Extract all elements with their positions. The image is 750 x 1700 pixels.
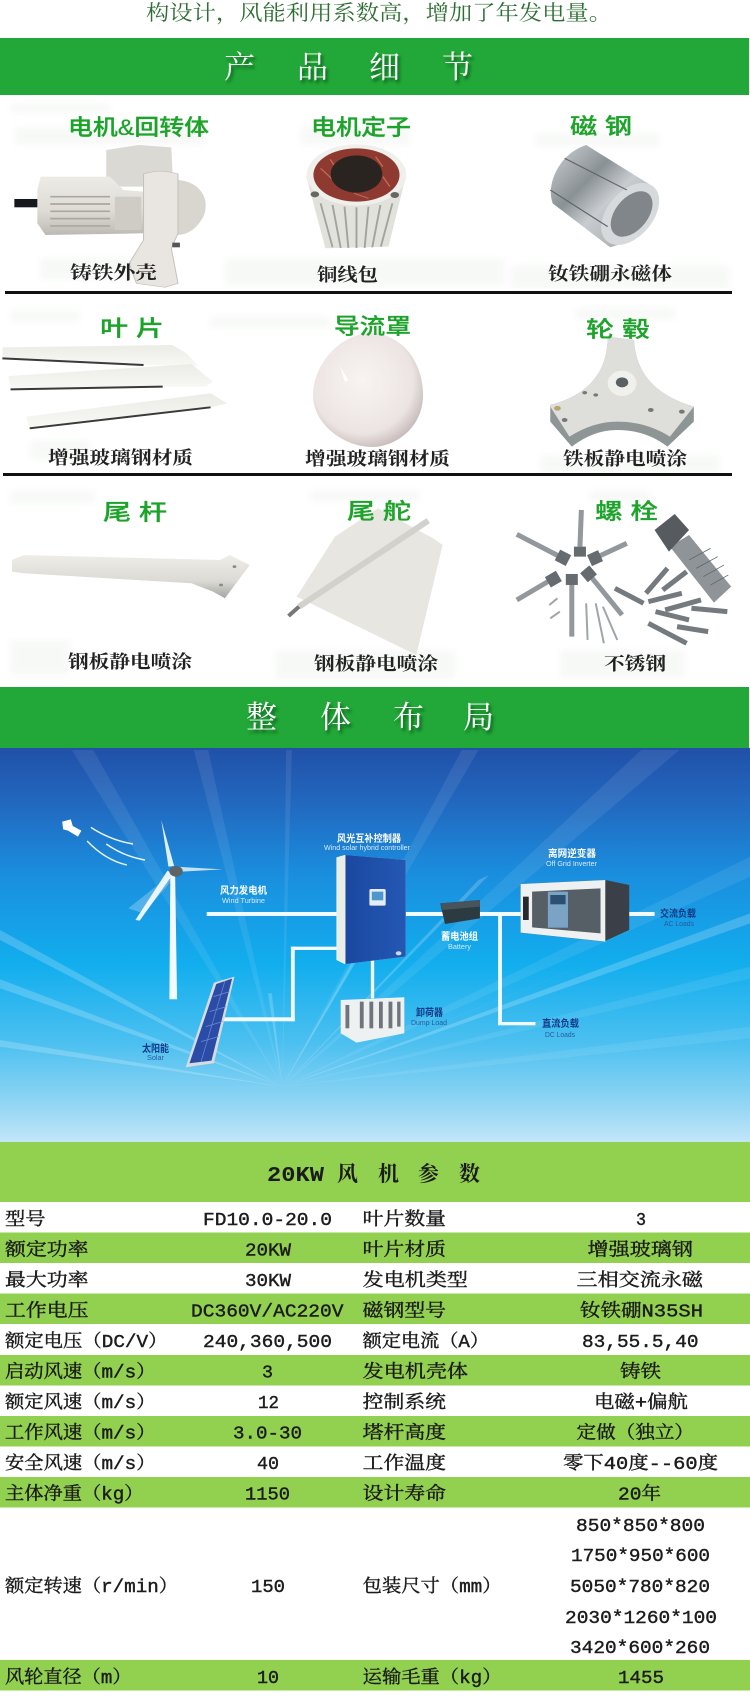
label: solar: Solar (147, 1055, 165, 1062)
panel: system diagram (0, 748, 750, 1142)
row: working voltage: DC360V/AC220V (191, 1302, 344, 1322)
row 3 product: tail boom: 钢板静电喷涂 (68, 651, 193, 672)
row: rated speed and package size (5, 1517, 717, 1659)
row: rated speed and package size: 150 (251, 1578, 285, 1598)
striped row backgrounds (0, 1232, 750, 1690)
label: controller (324, 832, 411, 852)
label: dump load: Dump Load (411, 1020, 447, 1027)
row 3 product: bolts: 不锈钢 (604, 654, 666, 674)
label: DC loads: DC Loads (545, 1032, 575, 1039)
label: AC loads (660, 907, 696, 928)
icon: battery (440, 900, 480, 924)
row 3 product: bolts: 螺 栓 (595, 499, 658, 524)
icon: dump load (341, 997, 404, 1043)
label: battery (441, 930, 478, 951)
row 1 product: magnets: 钕铁硼永磁体 (548, 263, 672, 284)
row: rated voltage: 额定电压（DC/V） (5, 1331, 168, 1353)
row 1 product: motor and slewing body (14, 115, 209, 287)
row: rated power: 额定功率 (5, 1240, 88, 1262)
row 3 product: tail boom: 尾 杆 (103, 500, 167, 525)
label: DC loads: 直流负载 (542, 1017, 579, 1030)
row: model: 3 (636, 1211, 646, 1231)
icon: nose cone (313, 333, 423, 447)
row: rated speed and package size: 包装尺寸（mm） (363, 1576, 502, 1598)
row: safe wind speed: 40 (257, 1455, 279, 1475)
row: max power: 最大功率 (5, 1270, 88, 1292)
banner: overall layout (0, 687, 749, 748)
divider line (5, 291, 732, 294)
icon: bolts (517, 510, 731, 643)
row: rated voltage: 额定电流（A） (363, 1331, 489, 1353)
row 3 product: tail fin: 钢板静电喷涂 (314, 653, 439, 674)
icon: tail boom (12, 555, 250, 598)
row: rated voltage: 240,360,500 (203, 1333, 332, 1353)
row: working wind speed: 3.0-30 (233, 1424, 302, 1444)
row: rated wind speed: 控制系统 (363, 1392, 446, 1414)
row: rated speed and package size: 3420*600*260 (570, 1639, 710, 1659)
table header: 风机参数 (337, 1163, 480, 1188)
row: working wind speed: 塔杆高度 (363, 1422, 446, 1444)
row 1 product: stator: 电机定子 (311, 115, 411, 140)
label: AC loads: AC Loads (664, 921, 694, 928)
row: max power: 三相交流永磁 (576, 1270, 704, 1292)
row: rated speed and package size: 1750*950*600 (571, 1547, 710, 1567)
icon: hub (550, 337, 694, 447)
label: AC loads: 交流负载 (660, 907, 696, 920)
row: rated wind speed: 12 (258, 1394, 279, 1414)
row: max power (5, 1270, 704, 1292)
row: rated power (5, 1240, 693, 1262)
row: rated wind speed: 电磁+偏航 (594, 1392, 688, 1414)
row 2 product: nose cone: 增强玻璃钢材质 (305, 448, 450, 469)
row: net weight: 1150 (245, 1486, 290, 1506)
label: wind turbine (220, 884, 267, 905)
table: 20KW turbine parameters (0, 1142, 750, 1690)
top intro text: 构设计，风能利用系数高，增加了年发电量。 (146, 1, 612, 26)
row: safe wind speed (5, 1453, 718, 1475)
row 1 product: motor and slewing body: 铸铁外壳 (70, 263, 157, 283)
row: rated speed and package size: 额定转速（r/min） (5, 1576, 178, 1598)
row: working voltage: 工作电压 (5, 1300, 88, 1322)
row 3 product: tail fin (289, 499, 443, 674)
table header: 20KW (267, 1165, 324, 1188)
row: start wind speed (5, 1362, 661, 1384)
banner: product details (0, 38, 749, 95)
row: working wind speed (5, 1422, 694, 1444)
row: max power: 30KW (245, 1272, 291, 1292)
row: net weight: 20年 (618, 1482, 661, 1506)
row: safe wind speed: 零下40度--60度 (563, 1453, 718, 1475)
label: dump load: 卸荷器 (416, 1006, 443, 1019)
row: working wind speed: 定做（独立） (576, 1422, 694, 1444)
row 2 product: blades (2, 316, 227, 468)
row 3 product: bolts (517, 499, 731, 674)
icon: inverter (521, 880, 629, 942)
row: rated power: 增强玻璃钢 (588, 1240, 693, 1262)
row: rated speed and package size: 5050*780*820 (570, 1578, 710, 1598)
row 2 product: hub (550, 317, 694, 469)
row 1 product: magnets: 磁 钢 (570, 114, 632, 139)
banner: overall layout: 整体布局 (246, 700, 494, 735)
row: rated speed and package size: 850*850*800 (576, 1517, 705, 1537)
row 3 product: tail boom (12, 500, 250, 672)
banner: product details: 产品细节 (224, 50, 473, 85)
icon: stator (306, 144, 406, 248)
row 2 product: hub: 铁板静电喷涂 (563, 448, 688, 469)
label: inverter: Off Grid Inverter (546, 861, 598, 868)
row: start wind speed: 铸铁 (620, 1362, 661, 1384)
row: working voltage: 磁钢型号 (363, 1300, 446, 1322)
label: dump load (411, 1006, 447, 1027)
row: safe wind speed: 安全风速（m/s） (5, 1453, 156, 1475)
row 2 product: nose cone (305, 314, 450, 469)
row: start wind speed: 启动风速（m/s） (5, 1362, 156, 1384)
row: start wind speed: 发电机壳体 (363, 1362, 468, 1384)
row: rated voltage (5, 1331, 698, 1353)
row: rotor diameter: 风轮直径（m） (5, 1667, 132, 1689)
row 1 product: magnets (548, 114, 672, 284)
row: rated wind speed (5, 1392, 688, 1414)
row: rotor diameter (5, 1667, 664, 1689)
label: battery: 蓄电池组 (441, 930, 478, 943)
row: rotor diameter: 1455 (618, 1669, 664, 1689)
row: net weight: 设计寿命 (363, 1484, 446, 1506)
row: rated wind speed: 额定风速（m/s） (5, 1392, 156, 1414)
label: controller: 风光互补控制器 (337, 832, 401, 845)
row: working voltage (5, 1300, 703, 1322)
label: DC loads (542, 1017, 579, 1039)
row: model: 型号 (5, 1209, 46, 1231)
row 2 product: nose cone: 导流罩 (334, 314, 411, 339)
divider line (3, 473, 732, 476)
icon: solar panel (186, 977, 234, 1067)
icon: hybrid controller (336, 855, 406, 964)
label: inverter: 离网逆变器 (548, 847, 596, 860)
row 3 product: tail fin: 尾 舵 (347, 499, 411, 524)
icon: motor (14, 145, 206, 287)
row: start wind speed: 3 (262, 1364, 273, 1384)
row 2 product: hub: 轮 毂 (586, 317, 650, 342)
row: model (5, 1209, 646, 1231)
row 2 product: blades: 增强玻璃钢材质 (48, 447, 193, 468)
label: battery: Battery (448, 944, 472, 951)
row: working voltage: 钕铁硼N35SH (580, 1300, 703, 1322)
icon: magnet cylinder (550, 145, 671, 251)
row: rotor diameter: 10 (257, 1669, 279, 1689)
label: controller: Wind solar hybrid controller (324, 845, 411, 852)
icon: three blades (2, 345, 227, 428)
row 1 product: stator: 铜线包 (317, 265, 378, 285)
row: model: FD10.0-20.0 (203, 1211, 332, 1231)
icon: tail fin (289, 508, 443, 655)
label: inverter (546, 847, 598, 868)
light rays (0, 750, 750, 1087)
wiring lines (207, 912, 655, 1025)
row: rated voltage: 83,55.5,40 (582, 1333, 698, 1353)
label: solar: 太阳能 (142, 1042, 169, 1055)
row: rated power: 叶片材质 (363, 1240, 446, 1262)
row 2 product: blades: 叶 片 (100, 316, 164, 341)
row 1 product: stator (306, 115, 411, 285)
row: net weight: 主体净重（kg） (5, 1484, 144, 1506)
row: rated speed and package size: 2030*1260*100 (565, 1609, 717, 1629)
wind arrow and gust lines (62, 819, 145, 865)
label: solar (142, 1042, 169, 1062)
row: working wind speed: 工作风速（m/s） (5, 1422, 156, 1444)
row: net weight (5, 1482, 661, 1506)
row: max power: 发电机类型 (363, 1270, 468, 1292)
table header (0, 1142, 750, 1202)
row: rotor diameter: 运输毛重（kg） (363, 1667, 502, 1689)
row: model: 叶片数量 (363, 1209, 446, 1231)
label: wind turbine: 风力发电机 (220, 884, 267, 897)
icon: wind turbine (128, 820, 223, 999)
row 1 product: motor and slewing body: 电机&回转体 (68, 115, 209, 140)
faint watermark smudges (10, 103, 730, 680)
row: rated power: 20KW (245, 1242, 291, 1262)
label: wind turbine: Wind Turbine (222, 898, 265, 905)
row: safe wind speed: 工作温度 (363, 1453, 446, 1475)
